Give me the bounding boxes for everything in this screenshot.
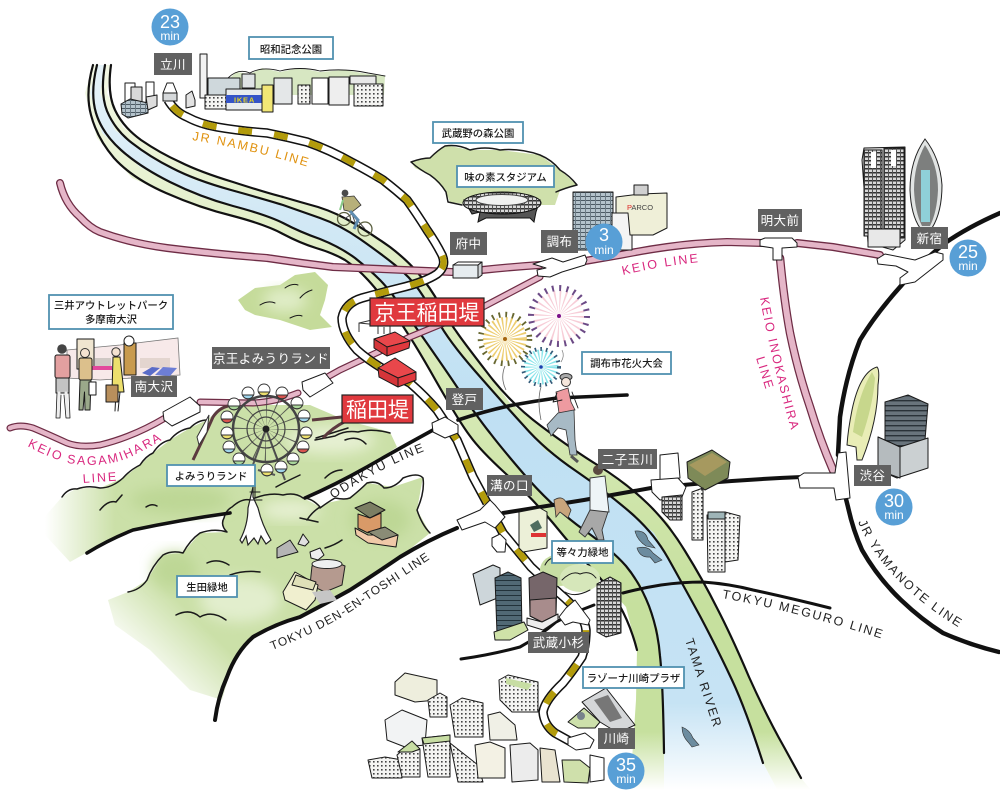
- illustration: Ikuta pagoda museum: [355, 502, 398, 547]
- badge: 3 min: 3: [599, 225, 609, 245]
- place: Chofu fireworks festival: 調布市花火大会: [590, 357, 663, 370]
- red label: Keio-Inadazutsumi: 京王稲田堤: [374, 302, 480, 325]
- illustration: pedestrian walking dog: [554, 465, 609, 540]
- label: Kawasaki: [598, 728, 635, 749]
- Keio Inokashira line: [780, 258, 833, 470]
- station: Keio-Inadazutsumi red marker: [374, 332, 410, 356]
- Tokyu Den-en-toshi line: [215, 477, 802, 720]
- green hill near Fuchu: [238, 272, 332, 330]
- Odakyu line label: ODAKYU LINE: [330, 443, 424, 498]
- station: Chofu: [533, 255, 587, 277]
- Keio Sagamihara line label: KEIO SAGAMIHARA: [28, 434, 162, 465]
- label: Shibuya: 渋谷: [860, 469, 885, 483]
- label: Futako-Tamagawa: 二子玉川: [602, 453, 653, 467]
- fireworks: [480, 288, 587, 420]
- place: Todoroki Ryokuchi: [552, 541, 613, 563]
- place: Lazona Kawasaki Plaza: [583, 667, 684, 688]
- Tokyu Den-en-toshi line label: TOKYU DEN-EN-TOSHI LINE: [270, 552, 430, 649]
- station: Kawasaki: [568, 733, 594, 750]
- gondolas: [221, 384, 312, 476]
- Keio line label: KEIO LINE: [622, 254, 698, 275]
- JR Nambu line label: JR NAMBU LINE: [192, 132, 308, 166]
- place: Ajinomoto Stadium: 味の素スタジアム: [464, 171, 547, 184]
- label: Meidaimae: 明大前: [761, 213, 799, 228]
- badge: 3 min: [586, 224, 622, 260]
- badge: 23 min: min: [160, 29, 180, 43]
- label: Mizonokuchi: 溝の口: [490, 479, 529, 493]
- illustration: fish: [635, 531, 699, 747]
- illustration: cyclist: [338, 190, 372, 236]
- place: Mitsui Outlet Park: 多摩南大沢: [85, 313, 138, 326]
- illustration: Minami-Osawa outlet station and shoppers: [55, 336, 180, 418]
- illustration: Kawasaki building cluster: [368, 673, 604, 783]
- place: Yomiuri Land: [167, 465, 255, 486]
- Keio Sagamihara line label, second row: LINE: [82, 470, 119, 486]
- station: Shinjuku: [877, 252, 943, 285]
- IKEA store: IKEA: [234, 96, 255, 104]
- place name labels: [49, 37, 684, 688]
- illustration: Mizonokuchi building: [519, 508, 547, 552]
- station: Inadazutsumi red marker: [378, 358, 416, 387]
- shopper: man with bag: [79, 348, 96, 410]
- badge: 30 min: [876, 488, 912, 526]
- label: Minami-Osawa: [131, 376, 177, 397]
- illustration: Futakotamagawa buildings: [651, 450, 740, 572]
- badge: 3 min: min: [594, 243, 614, 257]
- badge: 23 min: [152, 8, 188, 46]
- place: Mitsui Outlet Park: [49, 295, 173, 329]
- JR Yamanote line: [838, 213, 1000, 652]
- place: Ikuta Ryokuchi: [177, 576, 237, 597]
- badge: 25 min: [950, 240, 986, 276]
- firework: yellow: [480, 314, 530, 390]
- Keio line (pink): [10, 183, 880, 470]
- place: Yomiuri Land: よみうりランド: [175, 471, 247, 483]
- label: Tachikawa: 立川: [160, 58, 186, 72]
- place: Lazona Kawasaki Plaza: ラゾーナ川崎プラザ: [587, 672, 681, 685]
- label: Minami-Osawa: 南大沢: [135, 379, 173, 394]
- label: Kawasaki: 川崎: [604, 732, 629, 746]
- label: Keio-Yomiuri-Land: [212, 347, 330, 369]
- place: Ajinomoto Stadium: [457, 166, 554, 187]
- Odakyu line: [87, 395, 627, 553]
- PARCO sign: PARCO: [627, 203, 653, 212]
- illustration: white bell statue: [240, 486, 271, 545]
- illustration: Musashino-no-Mori park: [411, 145, 577, 222]
- firework: cyan: [523, 349, 559, 420]
- illustration: Ferris wheel and coaster: [193, 384, 346, 480]
- Tokyu Meguro line: [461, 582, 830, 659]
- station: Keio-Yomiuri-Land: [302, 373, 333, 397]
- illustration: Musashi-Kosugi towers: [473, 565, 621, 640]
- forest ink outlines: [62, 420, 430, 620]
- red label: Inadazutsumi: 稲田堤: [346, 399, 409, 422]
- badge: 23 min: 23: [160, 12, 180, 32]
- dog: [554, 498, 571, 518]
- JR Nambu line: [168, 100, 586, 743]
- label: Meidaimae: [758, 209, 802, 232]
- station: Meidaimae: [760, 238, 797, 260]
- illustration: Chofu buildings and PARCO: [573, 185, 667, 250]
- label: Shinjuku: 新宿: [917, 232, 942, 246]
- illustration: Todoroki green: [540, 554, 600, 595]
- illustration: Ikuta planetarium and rock: [277, 534, 345, 610]
- label: Noborito: [446, 388, 483, 410]
- illustration: Shinjuku towers: [862, 139, 942, 250]
- illustration: jogger: [547, 374, 578, 462]
- Tama River with green banks: [85, 65, 815, 795]
- Keio Inokashira line label: KEIO INOKASHIRA: [760, 297, 798, 430]
- label: Tachikawa: [154, 53, 192, 75]
- label: Noborito: 登戸: [452, 392, 477, 407]
- label: Musashi-Kosugi: 武蔵小杉: [533, 636, 584, 650]
- label: Keio-Yomiuri-Land: 京王よみうりランド: [213, 352, 329, 366]
- illustration: Lazona Kawasaki Plaza: [568, 688, 635, 733]
- place: Showa Kinen Park: 昭和記念公園: [260, 43, 322, 56]
- label: Shinjuku: [911, 227, 948, 249]
- badge: 35 min: 35: [616, 755, 636, 775]
- illustration: Shibuya buildings: [847, 367, 928, 478]
- river water: [90, 65, 780, 795]
- label: Futako-Tamagawa: [598, 449, 657, 469]
- stations: [163, 83, 943, 750]
- station: Musashi-Kosugi: [559, 600, 590, 625]
- place: Showa Kinen Park: [249, 37, 333, 59]
- label: Shibuya: [854, 465, 891, 486]
- station: Minami-Osawa: [163, 397, 200, 426]
- place: Mitsui Outlet Park: 三井アウトレットパーク: [54, 299, 168, 312]
- badge: 35 min: min: [616, 772, 636, 786]
- river bank: north: [100, 65, 815, 795]
- Tokyu Meguro line label: TOKYU MEGURO LINE: [724, 590, 883, 638]
- Tama River label: TAMA RIVER: [686, 638, 721, 727]
- badge: 25 min: 25: [958, 242, 978, 262]
- station: Shibuya: [798, 452, 850, 500]
- label: Chofu: [541, 230, 578, 253]
- label: Fuchu: [450, 232, 487, 255]
- badge: 35 min: [608, 752, 644, 790]
- station: Fuchu: [453, 262, 482, 278]
- label: Chofu: 調布: [547, 235, 572, 249]
- station: Mizonokuchi: [457, 500, 506, 552]
- Keio Sagamihara line: [10, 277, 540, 446]
- shopper: man in pink shirt: [55, 344, 70, 418]
- river bank: south: [85, 65, 664, 795]
- place: Todoroki Ryokuchi: 等々力緑地: [557, 546, 609, 559]
- illustration: Tachikawa cityscape: [121, 54, 385, 118]
- Keio Inokashira line label, second row: LINE: [756, 356, 774, 389]
- JR Yamanote line label: JR YAMANOTE LINE: [858, 520, 962, 627]
- badge: 30 min: min: [884, 508, 904, 522]
- label: Mizonokuchi: [487, 475, 532, 496]
- Ajinomoto Stadium: [463, 192, 541, 222]
- grey station labels: [131, 53, 948, 749]
- label: Fuchu: 府中: [456, 236, 481, 251]
- forest: Yomiuri Land and Ikuta green area: [40, 405, 430, 700]
- place: Musashino-no-Mori Park: [433, 122, 523, 143]
- place: Musashino-no-Mori Park: 武蔵野の森公園: [442, 127, 514, 140]
- firework: pink: [531, 288, 587, 362]
- black rail lines: [87, 213, 1000, 720]
- station: Noborito: [432, 417, 458, 438]
- place: Ikuta Ryokuchi: 生田緑地: [186, 581, 228, 594]
- shopper: woman with brown bag: [106, 348, 124, 411]
- badge: 30 min: 30: [884, 491, 904, 511]
- small white building behind Keio-Inadazutsumi: [359, 320, 390, 334]
- IKEA store: [226, 89, 263, 110]
- place: Chofu fireworks festival: [582, 352, 671, 374]
- badge: 25 min: min: [958, 259, 978, 273]
- label: Musashi-Kosugi: [528, 632, 589, 653]
- station: Tachikawa: [163, 83, 177, 101]
